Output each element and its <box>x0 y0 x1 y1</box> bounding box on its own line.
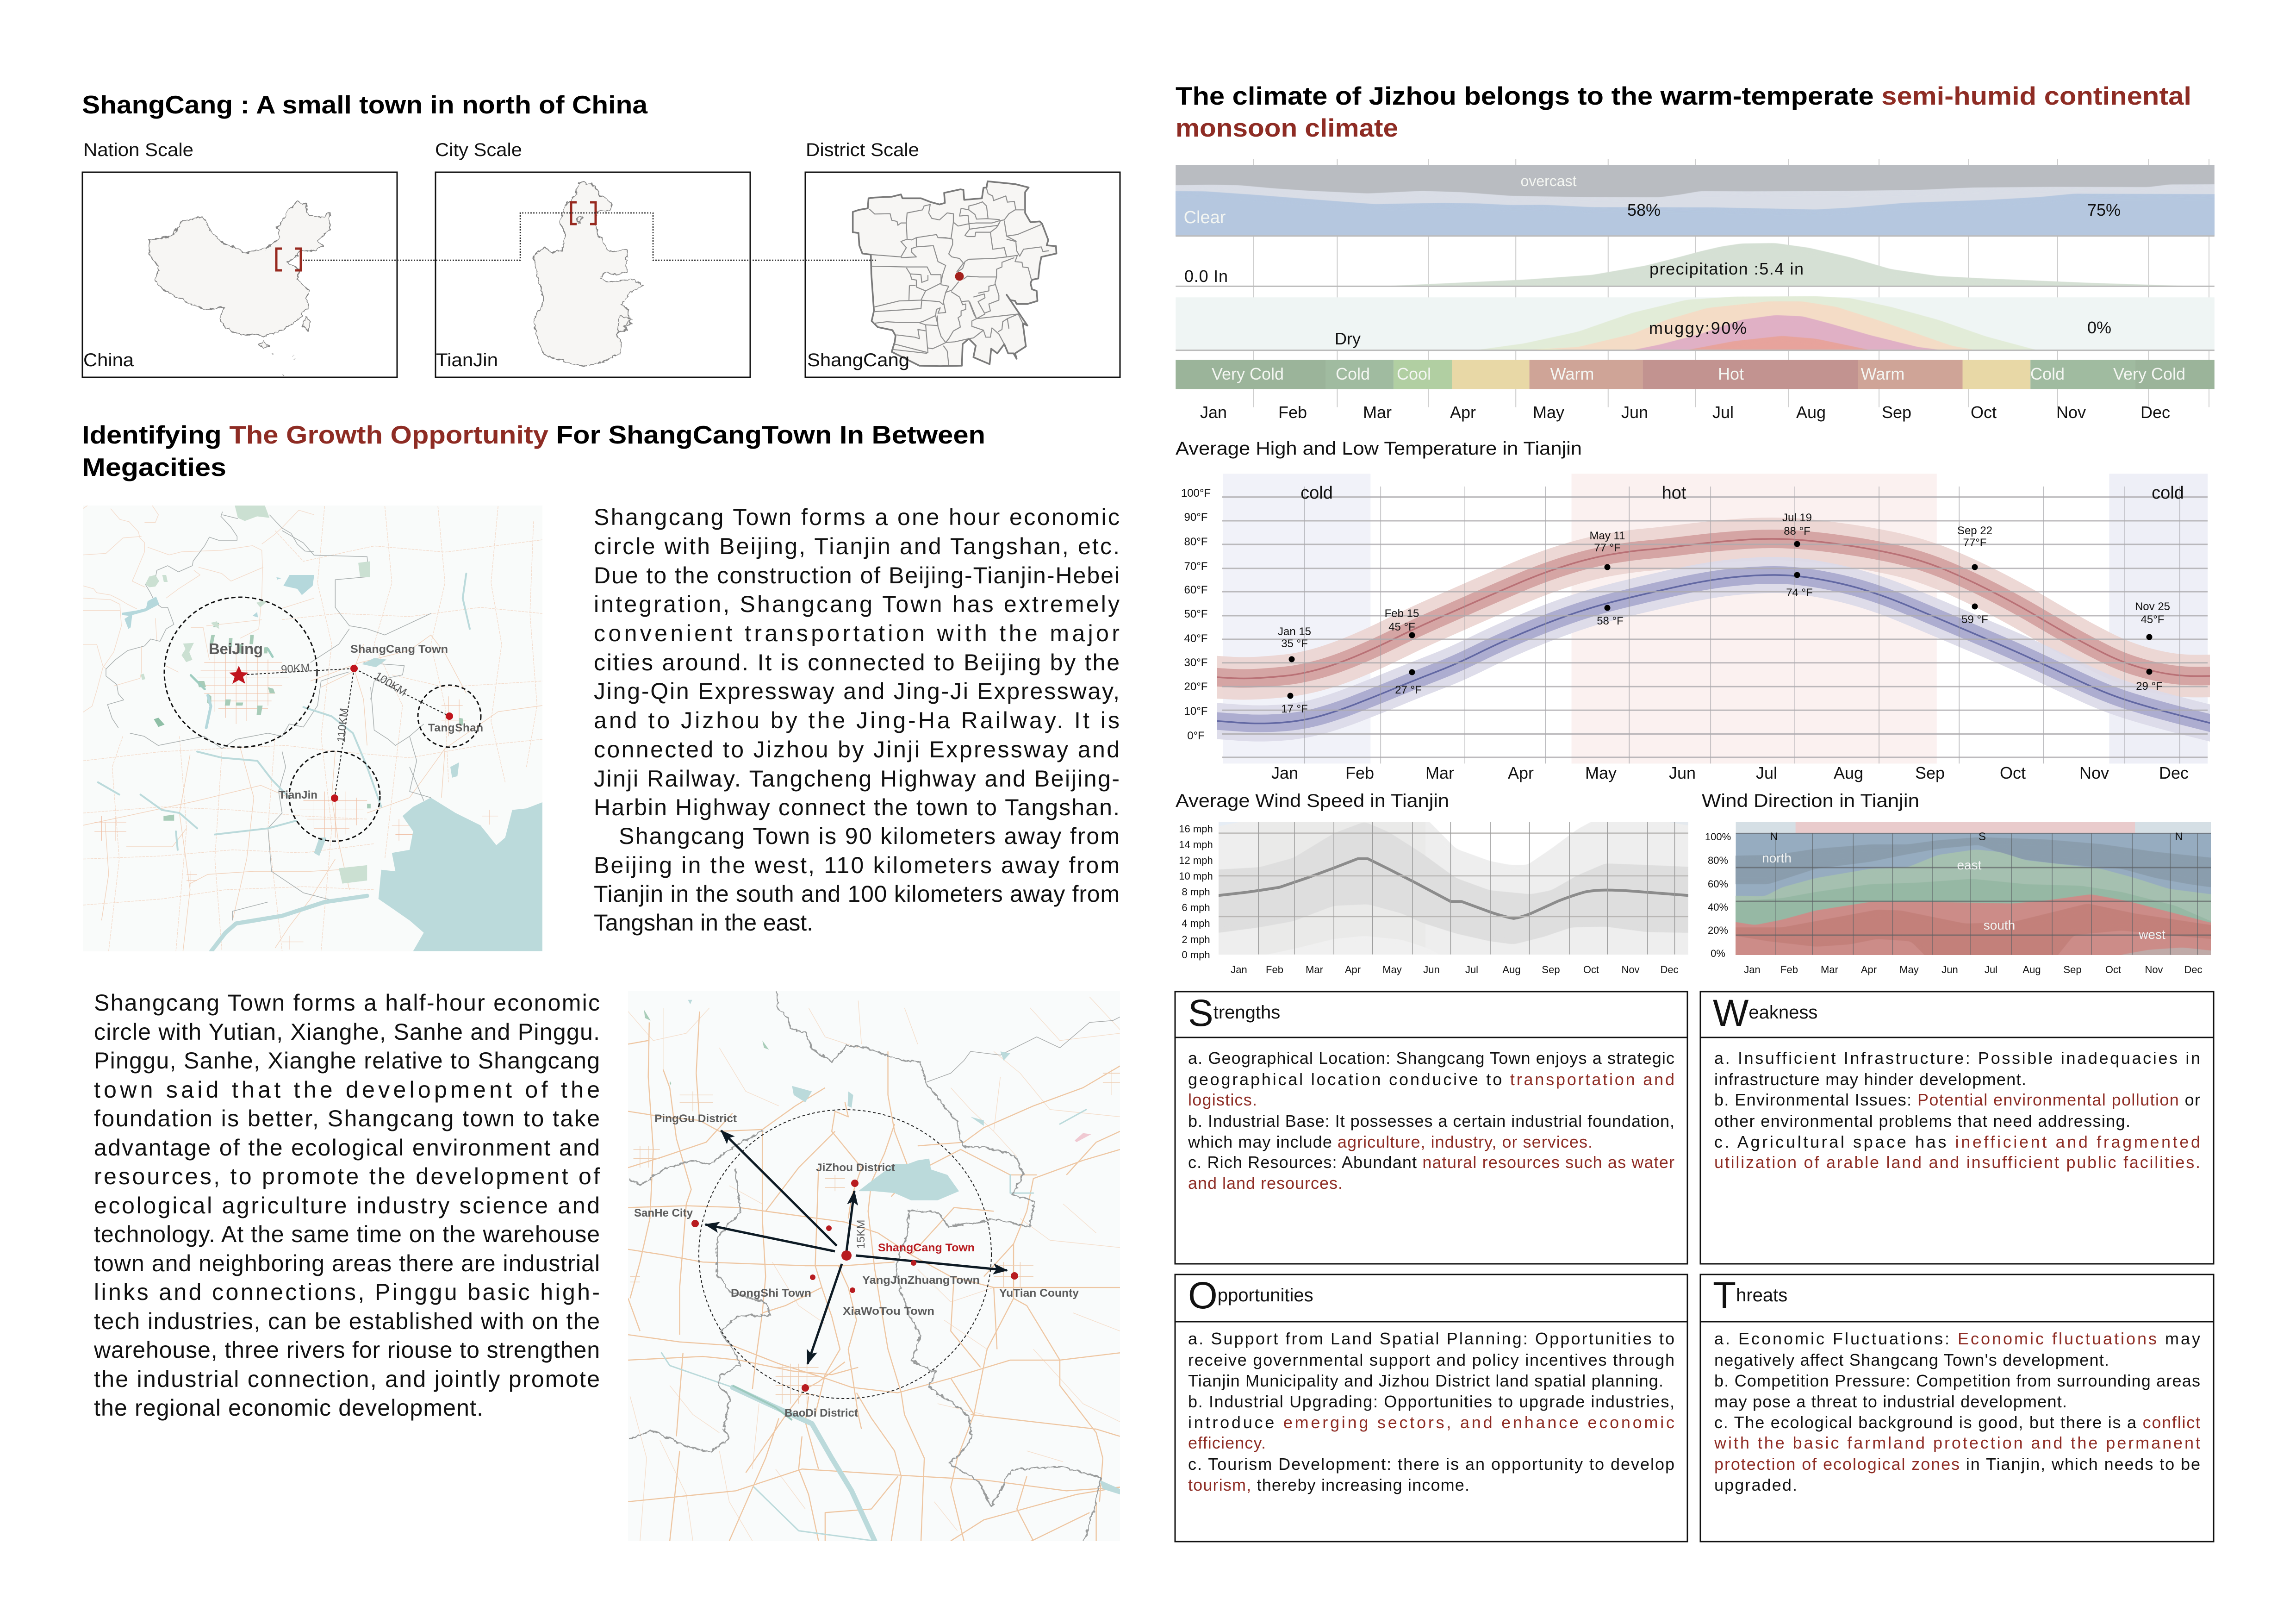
chart: annual climate bands <box>1144 159 2251 422</box>
text block: half hour economic circle: advantage of the ecological environment and <box>94 1135 600 1161</box>
precipitation area <box>1320 243 2251 299</box>
map frame: city <box>436 172 750 377</box>
data annotations: 27 °F <box>1395 684 1422 696</box>
speed axis: 14 mph <box>1179 839 1213 850</box>
town labels: YangJinZhuangTown <box>862 1274 980 1287</box>
town labels: JiZhou District <box>816 1162 895 1174</box>
panel: weakness <box>1700 992 2214 1264</box>
body: opportunities list: c. Tourism Development: there is an opportunity to develop <box>1188 1455 1674 1474</box>
temperature axis: 80°F <box>1184 536 1207 548</box>
heading: strengths: trengths <box>1213 1002 1280 1023</box>
body: strengths list: c. Rich Resources: Abundant natural resources such as water <box>1188 1153 1674 1172</box>
heading: strengths: S <box>1188 992 1213 1034</box>
heading: threats: hreats <box>1736 1285 1787 1305</box>
heading: opportunities: O <box>1188 1274 1218 1317</box>
label: district scale: District Scale <box>806 140 919 160</box>
month axis: Aug <box>1502 964 1521 975</box>
month axis: Sep <box>1915 763 1945 782</box>
month axis: Dec <box>2184 964 2203 975</box>
town labels <box>634 1112 1079 1419</box>
month axis: Sep <box>1542 964 1560 975</box>
text block: one hour economic circle: Shangcang Town forms a one hour economic <box>594 504 1120 530</box>
data annotations: 58 °F <box>1597 615 1624 627</box>
range circle: TangShan <box>418 685 481 747</box>
marker: ShangCang dot <box>955 272 964 281</box>
chart: wind direction <box>1705 822 2240 975</box>
temperature axis <box>1181 487 1211 742</box>
map labels: 100KM <box>373 669 409 699</box>
text block: half hour economic circle: warehouse, three rivers for riouse to strengthen <box>93 1337 600 1363</box>
north west traced terrain <box>83 506 314 728</box>
month axis: Aug <box>2022 964 2041 975</box>
chart: average high and low temperature <box>1181 474 2244 782</box>
data annotations: 29 °F <box>2136 680 2163 693</box>
data annotations: Sep 22 <box>1957 525 1992 537</box>
text block: half hour economic circle: foundation is better, Shangcang town to take <box>94 1106 600 1131</box>
heading: opportunities: pportunities <box>1218 1285 1313 1305</box>
data annotations: Feb 15 <box>1385 607 1419 620</box>
band labels: overcast <box>1521 173 1577 189</box>
month axis: May <box>1382 964 1402 975</box>
wind labels: west <box>2138 927 2165 942</box>
month axis <box>1271 763 2189 782</box>
text block: one hour economic circle: Jing-Qin Expressway and Jing-Ji Expressway, <box>594 678 1120 704</box>
heading: threats: T <box>1713 1274 1736 1317</box>
heading: climate: monsoon climate <box>1176 113 1398 142</box>
month axis: Apr <box>1861 964 1877 975</box>
data annotations: 74 °F <box>1786 587 1813 599</box>
town labels: YuTian County <box>999 1287 1079 1299</box>
label: nation scale: Nation Scale <box>83 140 193 160</box>
month axis: Apr <box>1450 403 1476 422</box>
month axis: May <box>1533 403 1564 422</box>
heading: growth opportunity: Identifying The Growth Opportunity For ShangCangTown In Between <box>82 420 985 449</box>
range circle: Beijing <box>164 597 317 747</box>
body: weakness list: b. Environmental Issues: Potential environmental pollution or <box>1714 1090 2200 1109</box>
body: threats list: may pose a threat to industrial development. <box>1714 1392 2067 1411</box>
text block: one hour economic circle: cities around. It is connected to Beijing by the <box>594 650 1120 675</box>
map labels: 90KM <box>280 662 311 676</box>
text block: half hour economic circle: Pinggu, Sanhe, Xianghe relative to Shangcang <box>94 1048 600 1074</box>
temperature axis: 90°F <box>1184 511 1207 524</box>
muggy levels <box>1415 296 2101 362</box>
band labels <box>1184 173 2185 383</box>
administrative boundaries <box>628 991 1100 1541</box>
temperature comfort strip <box>1176 360 2215 389</box>
town labels: DongShi Town <box>731 1287 811 1299</box>
month axis: Sep <box>2063 964 2082 975</box>
band labels: Cold <box>1336 364 1370 383</box>
band labels: muggy:90% <box>1649 319 1747 337</box>
body: weakness list: c. Agricultural space has inefficient and fragmented <box>1714 1132 2200 1151</box>
map labels: TianJin <box>279 789 317 801</box>
text block: one hour economic circle: Shangcang Town is 90 kilometers away from <box>619 823 1120 849</box>
month axis: Feb <box>1266 964 1283 975</box>
label: TianJin: TianJin <box>436 350 498 370</box>
body: threats list: b. Competition Pressure: Competition from surrounding areas <box>1714 1371 2200 1390</box>
Beijing urban fabric kept as light grid <box>94 647 498 949</box>
body: strengths list: logistics. <box>1188 1090 1257 1109</box>
month axis: May <box>1899 964 1919 975</box>
panel: opportunities <box>1175 1274 1687 1542</box>
data annotations <box>1278 512 2170 715</box>
month axis: Nov <box>1621 964 1640 975</box>
temperature axis: 0°F <box>1187 730 1205 742</box>
label: China: China <box>83 350 134 370</box>
month axis: Jan <box>1200 403 1227 422</box>
map labels: TangShan <box>428 722 483 734</box>
body: strengths list: geographical location conducive to transportation and <box>1188 1070 1674 1089</box>
cloud cover band <box>1176 165 2215 236</box>
month axis: Dec <box>2140 403 2170 422</box>
town labels: SanHe City <box>634 1207 693 1219</box>
chart: average wind speed <box>1179 818 1721 975</box>
marker: red brackets <box>276 202 596 270</box>
speed axis <box>1179 823 1213 961</box>
month axis: Jan <box>1231 964 1247 975</box>
body: strengths list: which may include agriculture, industry, or services. <box>1188 1132 1593 1151</box>
band labels: 58% <box>1627 200 1661 219</box>
icon: Beijing star <box>229 666 249 684</box>
town labels: XiaWoTou Town <box>843 1305 934 1318</box>
season bands <box>1223 474 2208 763</box>
wind labels: S <box>1979 831 1986 843</box>
town labels: ShangCang Town <box>878 1242 975 1254</box>
body: opportunities list <box>1188 1329 1674 1494</box>
map: half hour circle local <box>628 991 1120 1542</box>
band labels: Cold <box>2030 364 2065 383</box>
heading: weakness: W <box>1713 992 1748 1034</box>
text block: one hour economic circle: Due to the construction of Beijing-Tianjin-Hebei <box>594 562 1120 588</box>
month axis: Jul <box>1712 403 1734 422</box>
text block: half hour economic circle: resources, to promote the development of <box>94 1163 600 1189</box>
month axis: Feb <box>1345 763 1374 782</box>
month axis: Mar <box>1821 964 1838 975</box>
body: threats list: c. The ecological background is good, but there is a conflict <box>1714 1413 2200 1432</box>
percent axis: 20% <box>1708 924 1728 936</box>
data annotations: 59 °F <box>1961 613 1988 626</box>
season labels: cold <box>2152 483 2184 503</box>
label: ShangCang: ShangCang <box>807 350 909 370</box>
month axis: Oct <box>2000 763 2026 782</box>
temperature axis: 60°F <box>1184 584 1207 596</box>
month axis <box>1231 964 1679 975</box>
data annotations: Jul 19 <box>1782 512 1812 524</box>
city dots <box>331 665 453 802</box>
band labels: Warm <box>1861 364 1904 383</box>
month axis: Nov <box>2145 964 2163 975</box>
month axis: May <box>1585 763 1617 782</box>
month axis: Jan <box>1271 763 1298 782</box>
map labels <box>209 640 483 801</box>
percent axis: 100% <box>1705 831 1731 843</box>
town labels: BaoDi District <box>784 1407 858 1419</box>
text block: one hour economic circle: connected to Jizhou by Jinji Expressway and <box>594 737 1120 762</box>
band labels: Dry <box>1335 329 1361 348</box>
month axis: Aug <box>1796 403 1826 422</box>
month axis <box>1744 964 2203 975</box>
month axis: Jun <box>1669 763 1696 782</box>
map: China outline <box>148 201 329 375</box>
text block: one hour economic circle: convenient transportation with the major <box>594 620 1120 646</box>
town labels: PingGu District <box>654 1112 737 1125</box>
month axis: Mar <box>1425 763 1454 782</box>
range circle: TianJin <box>289 751 380 841</box>
text block: one hour economic circle: Tangshan in the east. <box>594 910 813 936</box>
text block: one hour economic circle: Tianjin in the south and 100 kilometers away from <box>594 881 1120 907</box>
speed axis: 16 mph <box>1179 823 1213 835</box>
text block: half hour economic circle: the industrial connection, and jointly promote <box>94 1366 600 1392</box>
month axis: Nov <box>2056 403 2086 422</box>
band labels: Very Cold <box>2113 364 2185 383</box>
map: ShangCang district outline <box>853 181 1057 366</box>
percent axis: 80% <box>1708 855 1728 866</box>
speed axis: 0 mph <box>1182 949 1210 961</box>
town dots <box>691 1180 1018 1392</box>
panel: threats <box>1700 1274 2214 1542</box>
month axis: Oct <box>1971 403 1997 422</box>
month axis: Oct <box>1583 964 1599 975</box>
body: strengths list: b. Industrial Base: It possesses a certain industrial foundation, <box>1188 1112 1674 1131</box>
band labels: Cool <box>1397 364 1431 383</box>
band labels: precipitation :5.4 in <box>1649 259 1804 278</box>
body: weakness list: a. Insufficient Infrastructure: Possible inadequacies in <box>1714 1049 2200 1068</box>
body: opportunities list: tourism, thereby increasing income. <box>1188 1475 1469 1494</box>
text block: half hour economic circle: ecological agriculture industry science and <box>94 1193 600 1218</box>
month axis: Jun <box>1941 964 1958 975</box>
body: strengths list: a. Geographical Location: Shangcang Town enjoys a strategic <box>1188 1049 1674 1068</box>
map: regional one hour circle <box>83 506 542 951</box>
heading: climate <box>1176 81 2191 142</box>
month axis: Jul <box>1756 763 1777 782</box>
text block: half hour economic circle: links and connections, Pinggu basic high- <box>94 1279 600 1305</box>
temperature axis: 30°F <box>1184 656 1207 669</box>
body: threats list: a. Economic Fluctuations: Economic fluctuations may <box>1714 1329 2200 1348</box>
text block: one hour economic circle: Harbin Highway connect the town to Tangshan. <box>594 794 1120 820</box>
text block: one hour economic circle: Jinji Railway. Tangcheng Highway and Beijing- <box>594 766 1120 792</box>
month axis: Apr <box>1508 763 1534 782</box>
body: weakness list: utilization of arable land and insufficient public facilities. <box>1714 1153 2200 1172</box>
temperature axis: 10°F <box>1184 705 1207 718</box>
arrows to neighbouring cities <box>705 1131 1007 1364</box>
body: threats list: protection of ecological zones in Tianjin, which needs to be <box>1714 1455 2200 1474</box>
panel: strengths <box>1175 992 1687 1264</box>
month axis <box>1200 403 2170 422</box>
band labels: 75% <box>2087 200 2121 219</box>
map labels: 110KM <box>335 707 350 743</box>
temperature axis: 40°F <box>1184 632 1207 645</box>
body: weakness list <box>1714 1049 2200 1172</box>
wind labels <box>1762 831 2183 942</box>
data annotations: 17 °F <box>1281 703 1308 715</box>
data annotations: Nov 25 <box>2135 600 2170 613</box>
label: city scale: City Scale <box>435 140 522 160</box>
body: opportunities list: a. Support from Land Spatial Planning: Opportunities to <box>1188 1329 1674 1348</box>
month axis: Mar <box>1363 403 1392 422</box>
body: opportunities list: introduce emerging sectors, and enhance economic <box>1188 1413 1674 1432</box>
text block: half hour economic circle <box>93 990 600 1421</box>
map frame: district <box>805 172 1120 377</box>
map labels: ShangCang Town <box>350 643 448 656</box>
data annotations: 45°F <box>2141 613 2164 626</box>
body: opportunities list: b. Industrial Upgrading: Opportunities to upgrade industries, <box>1188 1392 1674 1411</box>
map labels: BeiJing <box>209 640 263 657</box>
body: opportunities list: efficiency. <box>1188 1433 1266 1452</box>
percent axis: 0% <box>1711 948 1725 959</box>
heading: climate: The climate of Jizhou belongs to the warm-temperate semi-humid continental <box>1176 81 2191 110</box>
heading: growth opportunity: Megacities <box>82 453 226 481</box>
text block: half hour economic circle: tech industries, can be established with on the <box>94 1308 600 1334</box>
month axis: Jul <box>1985 964 1997 975</box>
text block: half hour economic circle: the regional economic development. <box>94 1395 483 1421</box>
body: threats list: negatively affect Shangcang Town's development. <box>1714 1350 2109 1369</box>
band labels: Hot <box>1718 364 1744 383</box>
data dots <box>1288 541 2152 699</box>
wind labels: east <box>1957 858 1982 872</box>
text block: one hour economic circle: circle with Beijing, Tianjin and Tangshan, etc. <box>594 533 1120 559</box>
month axis: Mar <box>1306 964 1323 975</box>
body: opportunities list: Tianjin Municipality and Jizhou District land spatial planning. <box>1188 1371 1663 1390</box>
text block: half hour economic circle: town and neighboring areas there are industrial <box>94 1250 600 1276</box>
temperature axis: 100°F <box>1181 487 1211 500</box>
body: weakness list: infrastructure may hinder development. <box>1714 1070 2026 1089</box>
body: threats list: upgraded. <box>1714 1475 1797 1494</box>
season labels <box>1300 483 2184 503</box>
speed axis: 12 mph <box>1179 855 1213 866</box>
month axis: Jan <box>1744 964 1761 975</box>
speed axis: 6 mph <box>1182 902 1210 913</box>
temperature axis: 50°F <box>1184 608 1207 620</box>
temperature axis: 70°F <box>1184 560 1207 573</box>
speed axis: 2 mph <box>1182 934 1210 945</box>
heading: wind direction: Wind Direction in Tianjin <box>1702 791 1919 811</box>
data annotations: 88 °F <box>1784 525 1811 537</box>
month axis: Feb <box>1278 403 1307 422</box>
text block: one hour economic circle <box>594 504 1120 936</box>
town labels: 15KM <box>855 1220 867 1249</box>
body: threats list <box>1714 1329 2200 1494</box>
temperature axis: 20°F <box>1184 681 1207 693</box>
data annotations: May 11 <box>1590 530 1625 542</box>
muggy background <box>1176 297 2215 350</box>
month axis: Oct <box>2105 964 2121 975</box>
text block: one hour economic circle: integration, Shangcang Town has extremely <box>594 591 1120 617</box>
text block: half hour economic circle: technology. At the same time on the warehouse <box>94 1221 600 1247</box>
percent axis <box>1705 831 1731 959</box>
season labels: cold <box>1300 483 1333 503</box>
data annotations: 35 °F <box>1281 637 1308 650</box>
wind labels: N <box>2175 831 2183 843</box>
data annotations: Jan 15 <box>1278 625 1311 638</box>
month axis: Jul <box>1465 964 1478 975</box>
body: opportunities list: receive governmental support and policy incentives through <box>1188 1350 1674 1369</box>
body: weakness list: other environmental problems that need addressing. <box>1714 1112 2130 1131</box>
text block: one hour economic circle: and to Jizhou by the Jing-Ha Railway. It is <box>594 707 1120 733</box>
month axis: Nov <box>2079 763 2109 782</box>
panel: location scale maps <box>82 140 1120 377</box>
month axis: Apr <box>1345 964 1361 975</box>
band labels: Very Cold <box>1212 364 1284 383</box>
text block: half hour economic circle: circle with Yutian, Xianghe, Sanhe and Pinggu. <box>94 1019 600 1045</box>
body: strengths list: and land resources. <box>1188 1174 1343 1193</box>
heading: growth opportunity <box>82 420 985 481</box>
month axis: Aug <box>1834 763 1863 782</box>
text block: half hour economic circle: Shangcang Town forms a half-hour economic <box>94 990 600 1016</box>
band labels: Warm <box>1550 364 1594 383</box>
title: ShangCang small town: ShangCang : A small town in north of China <box>82 90 647 119</box>
month axis: Dec <box>1660 964 1679 975</box>
month axis: Jun <box>1423 964 1440 975</box>
heading: temperature chart: Average High and Low Temperature in Tianjin <box>1176 438 1582 459</box>
month axis: Feb <box>1780 964 1798 975</box>
month axis: Jun <box>1621 403 1648 422</box>
heading: wind speed: Average Wind Speed in Tianjin <box>1176 791 1449 811</box>
month axis: Dec <box>2159 763 2189 782</box>
percent axis: 60% <box>1708 878 1728 890</box>
data annotations: 77 °F <box>1594 542 1621 554</box>
wind labels: south <box>1984 918 2015 932</box>
distance lines <box>239 668 449 798</box>
speed axis: 4 mph <box>1182 918 1210 929</box>
map frame: nation <box>82 172 397 377</box>
temperature bands <box>1191 539 2244 731</box>
percent axis: 40% <box>1708 901 1728 913</box>
data annotations: 77°F <box>1963 537 1986 549</box>
band labels: 0% <box>2087 318 2111 337</box>
text block: one hour economic circle: Beijing in the west, 110 kilometers away from <box>594 852 1120 878</box>
body: strengths list <box>1188 1049 1674 1193</box>
season labels: hot <box>1662 483 1686 503</box>
speed axis: 8 mph <box>1182 886 1210 898</box>
text block: half hour economic circle: town said that the development of the <box>94 1077 600 1103</box>
speed axis: 10 mph <box>1179 870 1213 882</box>
wind labels: N <box>1770 831 1778 843</box>
range circle: 15KM <box>699 1110 991 1399</box>
map: Tianjin outline <box>533 181 643 366</box>
band labels: 0.0 In <box>1184 267 1228 286</box>
connector: dotted scale line <box>303 213 876 260</box>
data annotations: 45 °F <box>1388 621 1415 633</box>
wind labels: north <box>1762 851 1792 865</box>
body: threats list: with the basic farmland protection and the permanent <box>1714 1433 2200 1452</box>
month axis: Sep <box>1882 403 1911 422</box>
band labels: Clear <box>1184 208 1226 227</box>
heading: weakness: eakness <box>1748 1002 1817 1023</box>
